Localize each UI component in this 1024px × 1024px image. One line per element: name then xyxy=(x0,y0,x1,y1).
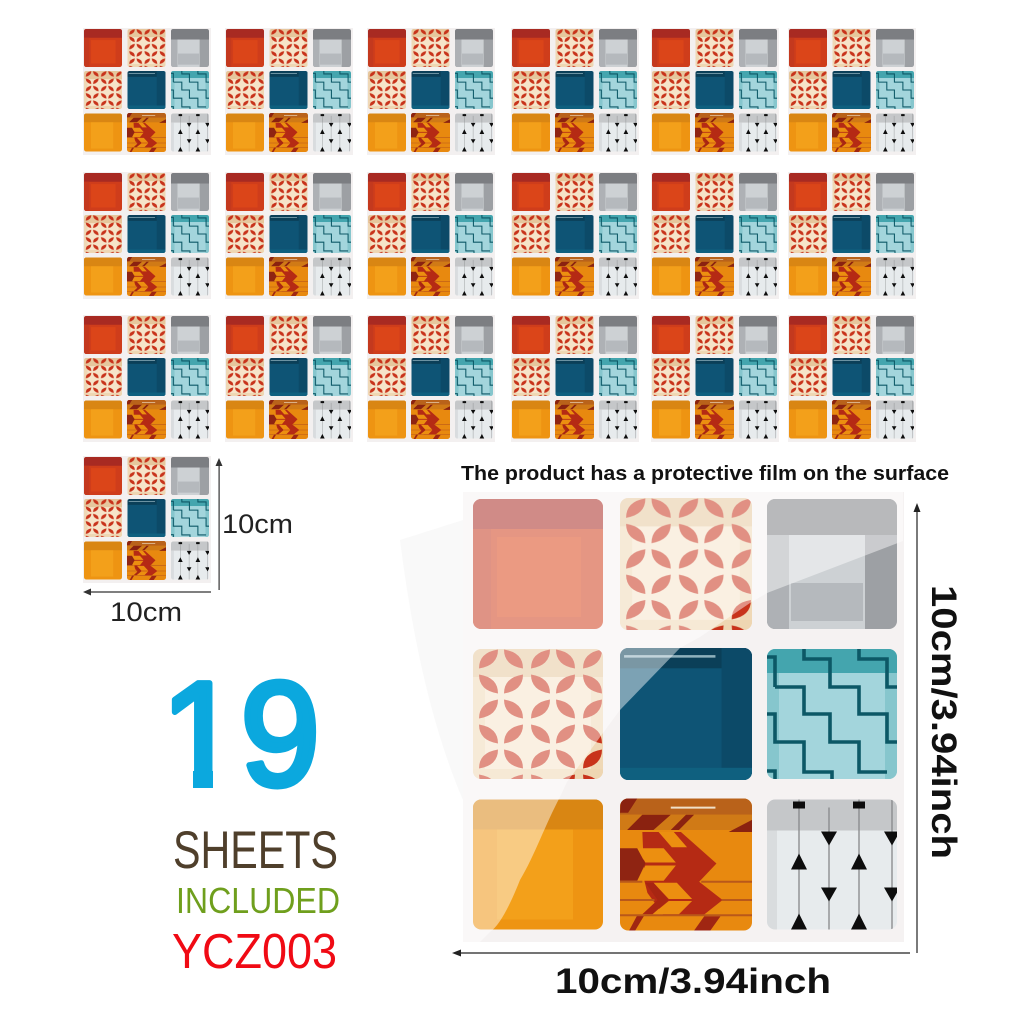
arrow: small sheet height xyxy=(216,458,222,590)
sheet row 2 column 3 xyxy=(367,172,495,299)
sheet row 1 column 3 xyxy=(367,28,495,155)
arrow: small sheet width xyxy=(83,588,211,596)
sheet row 1 column 4 xyxy=(511,28,639,155)
sheet row 2 column 5 xyxy=(651,172,779,299)
label: small sheet height: 10cm xyxy=(222,509,293,539)
sheet row 2 column 6 xyxy=(788,172,916,299)
label: sheets: SHEETS xyxy=(173,821,338,880)
sheet row 1 column 6 xyxy=(788,28,916,155)
arrow: large sheet width xyxy=(452,950,910,956)
sheet row 3 column 1 xyxy=(83,315,211,442)
sheet row 3 column 2 xyxy=(225,315,353,442)
sheet row 1 column 1 xyxy=(83,28,211,155)
arrow: large sheet height xyxy=(914,503,920,953)
sheet row 1 column 5 xyxy=(651,28,779,155)
faint peeled film edge xyxy=(400,520,463,800)
sheet row 3 column 4 xyxy=(511,315,639,442)
label: included: INCLUDED xyxy=(176,880,340,921)
sheet row 3 column 3 xyxy=(367,315,495,442)
sheet row 3 column 5 xyxy=(651,315,779,442)
sheet 19 with dimensions xyxy=(83,456,211,583)
sheet row 2 column 4 xyxy=(511,172,639,299)
protective film overlay xyxy=(463,492,903,942)
label: large sheet width: 10cm/3.94inch xyxy=(555,962,831,1001)
label: small sheet width: 10cm xyxy=(110,597,182,627)
sheet row 1 column 2 xyxy=(225,28,353,155)
label: product code: YCZ003 xyxy=(172,925,337,979)
label: large sheet height: 10cm/3.94inch xyxy=(924,585,963,859)
sheet row 2 column 2 xyxy=(225,172,353,299)
heading: protective film note: The product has a protective film on the surface xyxy=(461,462,949,485)
sheet row 3 column 6 xyxy=(788,315,916,442)
large sheet with film xyxy=(463,492,904,942)
sheet count number: 19 xyxy=(161,652,320,817)
sheet row 2 column 1 xyxy=(83,172,211,299)
